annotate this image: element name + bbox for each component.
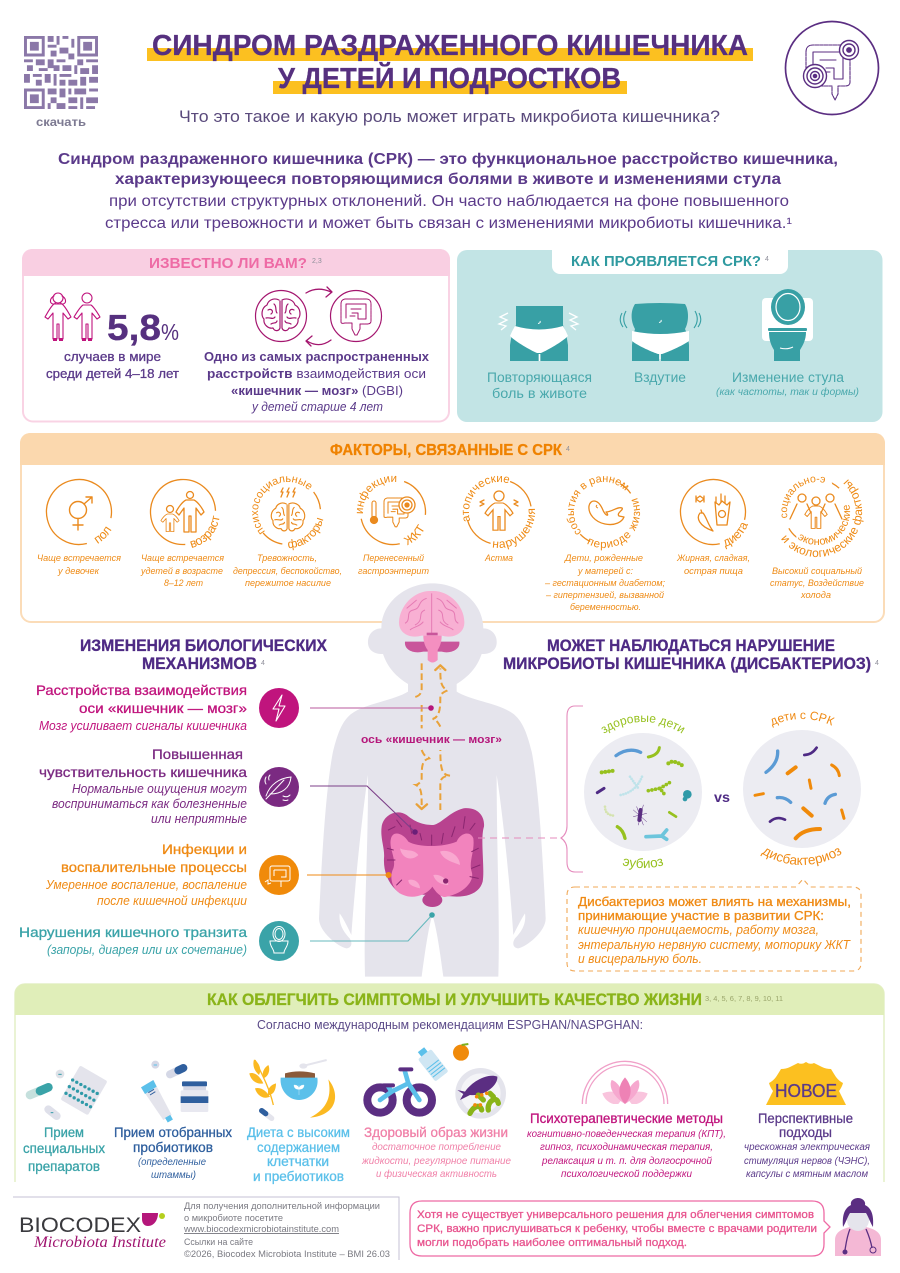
subtitle: Что это такое и какую роль может играть микробиота кишечника? <box>179 108 720 126</box>
mechanism: visceral hypersensitivity: восприниматься как болезненные <box>52 797 247 811</box>
connector: magenta <box>310 705 434 711</box>
mechanism: visceral hypersensitivity: или неприятные <box>151 812 247 826</box>
microbiota circle: dysbiosis <box>743 730 861 848</box>
icon: bloating <box>620 303 701 361</box>
mechanism: transit disorders: (запоры, диарея или их сочетание) <box>47 943 247 957</box>
callout: advice: могли подобрать наиболее оптимальный подход. <box>417 1237 687 1249</box>
factor: early life events: Дети, рожденные <box>564 553 643 564</box>
text: perspective approaches: стимуляция нервов (ЧЭНС), <box>744 1156 870 1167</box>
callout: dysbiosis effects <box>567 879 861 971</box>
text: perspective approaches <box>744 1111 871 1180</box>
text: DGBI: «кишечник — мозг» (DGBI) <box>231 383 403 398</box>
callout: dysbiosis effects: кишечную проницаемость, работу мозга, <box>578 923 819 937</box>
icon: intestine with pain targets <box>786 22 878 114</box>
stat label: случаев в мире <box>64 350 161 364</box>
body silhouette <box>319 583 546 977</box>
factor: early life events: события в раннем <box>566 476 629 534</box>
label: eubiosis: эубиоз <box>622 858 664 870</box>
text: medication: Прием <box>44 1125 84 1140</box>
heading: dysbiosis: МИКРОБИОТЫ КИШЕЧНИКА (ДИСБАКТЕРИОЗ) <box>503 655 871 673</box>
label: vs: vs <box>714 789 730 805</box>
heading: biological mechanisms: 4 <box>261 660 265 667</box>
panel heading: did you know: ИЗВЕСТНО ЛИ ВАМ? <box>149 255 307 272</box>
QR code <box>24 36 98 129</box>
intestines <box>381 808 484 907</box>
panel heading: relieve symptoms: 3, 4, 5, 6, 7, 8, 9, 10, 11 <box>705 994 783 1003</box>
text: DGBI: расстройств взаимодействия оси <box>207 366 426 381</box>
text: healthy lifestyle <box>361 1125 511 1180</box>
mechanism: gut-brain disorder: Расстройства взаимодействия <box>36 682 247 698</box>
factor: GI infections: Перенесенный <box>363 553 425 564</box>
factor: early life events: беременностью. <box>570 602 641 613</box>
text: DGBI <box>204 349 430 414</box>
text: healthy lifestyle: и физическая активность <box>376 1168 497 1180</box>
connector: purple <box>310 786 418 835</box>
footer text: www.biocodexmicrobiotainstitute.com <box>183 1224 339 1234</box>
mechanism: visceral hypersensitivity: Нормальные ощущения могут <box>72 782 247 796</box>
label: children with IBS: дети с СРК <box>772 712 835 728</box>
factor: socio-economic <box>770 476 864 601</box>
callout: advice: Хотя не существует универсального решения для облегчения симптомов <box>417 1209 814 1221</box>
heading: dysbiosis: МОЖЕТ НАБЛЮДАТЬСЯ НАРУШЕНИЕ <box>547 637 835 655</box>
text: psychotherapy: психологической поддержки <box>561 1169 692 1180</box>
factor: sex: Чаще встречается <box>37 553 121 564</box>
label: dysbiosis: дисбактериоз <box>760 848 842 866</box>
symptom labels: боль в животе <box>492 386 587 401</box>
panel: how to relieve symptoms <box>15 984 884 1184</box>
factor: age: возраст <box>190 516 220 548</box>
factor: socio-economic: холода <box>800 590 831 601</box>
text: medication <box>23 1125 105 1174</box>
text: perspective approaches: капсулы с мятным маслом <box>746 1169 868 1180</box>
icon: healthy lifestyle <box>367 1044 506 1119</box>
callout: advice: СРК, важно прислушиваться к ребенку, чтобы вместе с врачами родители <box>417 1223 817 1235</box>
panel heading: how IBS manifests: КАК ПРОЯВЛЯЕТСЯ СРК? <box>571 253 761 270</box>
icon: probiotics <box>141 1061 208 1122</box>
icon: gut-brain axis <box>256 287 382 346</box>
text: fiber diet: клетчатки <box>267 1154 329 1169</box>
factor: diet <box>676 478 750 577</box>
factor: early life events: у матерей с: <box>577 566 633 577</box>
footer rule <box>13 1197 399 1260</box>
text: perspective approaches: чрескожная электрическая <box>744 1142 871 1153</box>
text: probiotics: Прием отобранных <box>114 1125 232 1140</box>
stat label <box>46 350 179 381</box>
intro text <box>58 151 838 232</box>
panel heading: how IBS manifests: 4 <box>765 256 769 263</box>
text: perspective approaches: Перспективные <box>758 1111 853 1126</box>
factor: psychosocial: пережитое насилие <box>245 578 331 589</box>
stat: 5,8%: 5,8 <box>107 307 161 348</box>
gut-brain axis arrows <box>413 663 450 810</box>
mechanism: gut-brain disorder <box>36 682 247 733</box>
callout: dysbiosis effects: и висцеральную боль. <box>578 952 702 966</box>
guideline note: Согласно международным рекомендациям ESPGHAN/NASPGHAN: <box>257 1017 643 1032</box>
factor: socio-economic: социально-э <box>781 476 825 518</box>
factor: age <box>140 478 224 589</box>
icon: fiber diet <box>249 1059 335 1118</box>
logo: Biocodex: BIOCODEX <box>19 1214 141 1237</box>
factor: GI infections: гастроэнтерит <box>358 566 429 577</box>
factor: psychosocial: Тревожность, <box>257 553 317 564</box>
label: healthy children: здоровые дети <box>602 716 685 734</box>
symptom labels: Изменение стула <box>732 370 845 385</box>
factor: early life events: – гипертензией, вызванной <box>545 590 665 601</box>
text: probiotics: пробиотиков <box>133 1140 213 1155</box>
footer text: о микробиоте посетите <box>184 1213 283 1223</box>
factor: socio-economic: и экологические факторы <box>781 479 864 558</box>
callout: dysbiosis effects: энтеральную нервную систему, моторику ЖКТ <box>578 938 851 952</box>
connector: teal <box>310 912 435 941</box>
panel: factors <box>20 433 885 623</box>
factor: GI infections <box>356 476 429 577</box>
footer text: Для получения дополнительной информации <box>184 1201 380 1211</box>
factor: psychosocial: факторы <box>288 518 324 550</box>
icon: toilet small <box>259 921 299 961</box>
mechanism: visceral hypersensitivity: Повышенная <box>152 746 243 762</box>
mechanism: infections: Инфекции и <box>162 841 247 857</box>
factor: age: 8–12 лет <box>164 578 203 589</box>
logo: Biocodex: Microbiota Institute <box>33 1234 166 1251</box>
intro text: характеризующееся повторяющимися болями в животе и изменениями стула <box>115 171 781 188</box>
stat label: среди детей 4–18 лет <box>46 367 179 381</box>
symptom labels: (как частоты, так и формы) <box>716 386 859 398</box>
icon: lotus <box>582 1061 668 1104</box>
panel heading: did you know: 2,3 <box>312 258 322 265</box>
QR code: скачать <box>36 117 86 129</box>
factor: early life events: периоде жизни <box>587 498 640 550</box>
factor: psychosocial: депрессия, беспокойство, <box>233 566 342 577</box>
connector: dashed pink with brace <box>478 706 583 872</box>
microbiota circle: eubiosis <box>584 733 702 851</box>
panel heading: relieve symptoms: КАК ОБЛЕГЧИТЬ СИМПТОМЫ И УЛУЧШИТЬ КАЧЕСТВО ЖИЗНИ <box>207 990 702 1009</box>
panel heading: factors: 4 <box>566 446 570 453</box>
text: psychotherapy: релаксация и т. п. для долгосрочной <box>541 1156 712 1167</box>
factor: psychosocial <box>233 476 342 589</box>
mechanism: visceral hypersensitivity <box>39 746 247 826</box>
factor: atopic disorders: Астма <box>484 553 513 564</box>
text: psychotherapy <box>527 1111 726 1180</box>
heading: biological mechanisms <box>80 637 327 673</box>
icon: toilet <box>762 289 813 361</box>
badge: new: НОВОЕ <box>775 1081 837 1101</box>
icon: doctor <box>835 1198 881 1256</box>
text: healthy lifestyle: Здоровый образ жизни <box>364 1125 508 1140</box>
heading: dysbiosis: 4 <box>875 660 879 667</box>
text: perspective approaches: подходы <box>779 1125 832 1140</box>
title: СИНДРОМ РАЗДРАЖЕННОГО КИШЕЧНИКА <box>152 30 748 62</box>
icon: feather <box>259 767 299 807</box>
text: fiber diet: Диета с высоким <box>247 1125 350 1140</box>
connector: orange <box>307 872 392 878</box>
factor: atopic disorders: нарушения <box>492 508 536 550</box>
title: У ДЕТЕЙ И ПОДРОСТКОВ <box>278 61 621 95</box>
text: psychotherapy: Психотерапевтические методы <box>530 1111 723 1126</box>
callout: advice <box>410 1201 830 1256</box>
text: psychotherapy: когнитивно-поведенческая терапия (КПТ), <box>527 1129 726 1140</box>
factor: GI infections: инфекции <box>356 476 396 514</box>
factor: atopic disorders <box>462 476 536 564</box>
factor: diet: Жирная, сладкая, <box>676 553 750 564</box>
icon: abdominal pain <box>499 306 578 361</box>
text: fiber diet <box>247 1125 350 1184</box>
factor: sex <box>37 478 121 577</box>
mechanism: infections: после кишечной инфекции <box>97 894 247 908</box>
icon: inflamed gut <box>259 855 299 895</box>
text: fiber diet: и пребиотиков <box>253 1169 344 1184</box>
factor: socio-economic: экономические <box>798 505 850 545</box>
title <box>147 30 753 95</box>
factor: age: удетей в возрасте <box>140 566 223 577</box>
mechanism: gut-brain disorder: Мозг усиливает сигналы кишечника <box>39 719 247 733</box>
factor: age: Чаще встречается <box>141 553 224 564</box>
symptom labels <box>487 370 859 401</box>
text: DGBI: Одно из самых распространенных <box>204 349 430 364</box>
factor: early life events <box>544 476 665 613</box>
factor: diet: диета <box>724 523 748 550</box>
factor: atopic disorders: атопические <box>462 476 510 522</box>
stat: 5,8% <box>107 307 179 348</box>
mechanism: transit disorders <box>19 924 247 957</box>
label: gut-brain axis: ось «кишечник — мозг» <box>361 734 502 746</box>
stat: 5,8%: % <box>161 319 179 345</box>
footer text <box>183 1201 390 1259</box>
icon: girl and boy <box>45 293 100 341</box>
brain <box>399 591 464 662</box>
mechanism: infections: воспалительные процессы <box>61 859 247 875</box>
icon: pills <box>30 1065 108 1116</box>
heading: biological mechanisms: ИЗМЕНЕНИЯ БИОЛОГИЧЕСКИХ <box>80 637 327 655</box>
symptom labels: Повторяющаяся <box>487 370 592 385</box>
logo: Biocodex <box>19 1213 166 1251</box>
badge: new <box>766 1062 846 1105</box>
panel: did you know <box>22 249 450 422</box>
text: healthy lifestyle: жидкости, регулярное питание <box>361 1156 511 1167</box>
mechanism: gut-brain disorder: оси «кишечник — мозг» <box>79 700 247 716</box>
factor: diet: острая пища <box>684 566 743 577</box>
mechanism: infections <box>45 841 247 908</box>
mechanism: visceral hypersensitivity: чувствительность кишечника <box>39 764 247 780</box>
callout: dysbiosis effects: принимающие участие в развитии СРК: <box>578 909 824 923</box>
intro text: стресса или тревожности и может быть связан с изменениями микробиоты кишечника.¹ <box>105 215 792 232</box>
callout: dysbiosis effects: Дисбактериоз может влиять на механизмы, <box>578 895 851 909</box>
factor: sex: у девочек <box>57 566 99 577</box>
mechanism: transit disorders: Нарушения кишечного транзита <box>19 924 247 940</box>
text: fiber diet: содержанием <box>257 1140 340 1155</box>
factor: socio-economic: статус, Воздействие <box>770 578 864 589</box>
text: probiotics <box>114 1125 232 1181</box>
text: psychotherapy: гипноз, психодинамическая терапия, <box>540 1142 713 1153</box>
factor: socio-economic: Высокий социальный <box>772 566 863 577</box>
factor: psychosocial: психосоциальные <box>252 476 312 534</box>
mechanism: infections: Умеренное воспаление, воспаление <box>45 878 247 892</box>
factor: GI infections: ЖКТ <box>403 524 424 546</box>
text: DGBI: у детей старше 4 лет <box>251 400 383 414</box>
text: probiotics: (определенные <box>138 1157 206 1168</box>
factor: early life events: – гестационным диабетом; <box>544 578 665 589</box>
text: medication: специальных <box>23 1141 105 1156</box>
panel heading: factors: ФАКТОРЫ, СВЯЗАННЫЕ С СРК <box>330 442 562 459</box>
footer text: ©2026, Biocodex Microbiota Institute – BMI 26.03 <box>184 1249 390 1259</box>
intro text: Синдром раздраженного кишечника (СРК) — это функциональное расстройство кишечника, <box>58 151 838 168</box>
panel: how IBS manifests <box>457 250 882 422</box>
icon: lightning <box>259 688 299 728</box>
footer text: Ссылки на сайте <box>184 1237 253 1247</box>
text: probiotics: штаммы) <box>151 1170 196 1181</box>
symptom labels: Вздутие <box>634 370 686 385</box>
text: healthy lifestyle: достаточное потребление <box>372 1141 501 1153</box>
heading: dysbiosis <box>503 637 879 673</box>
text: medication: препаратов <box>28 1159 100 1174</box>
heading: biological mechanisms: МЕХАНИЗМОВ <box>142 655 257 673</box>
intro text: при отсутствии структурных отклонений. Он часто наблюдается на фоне повышенного <box>109 193 789 210</box>
factor: sex: пол <box>94 526 112 544</box>
